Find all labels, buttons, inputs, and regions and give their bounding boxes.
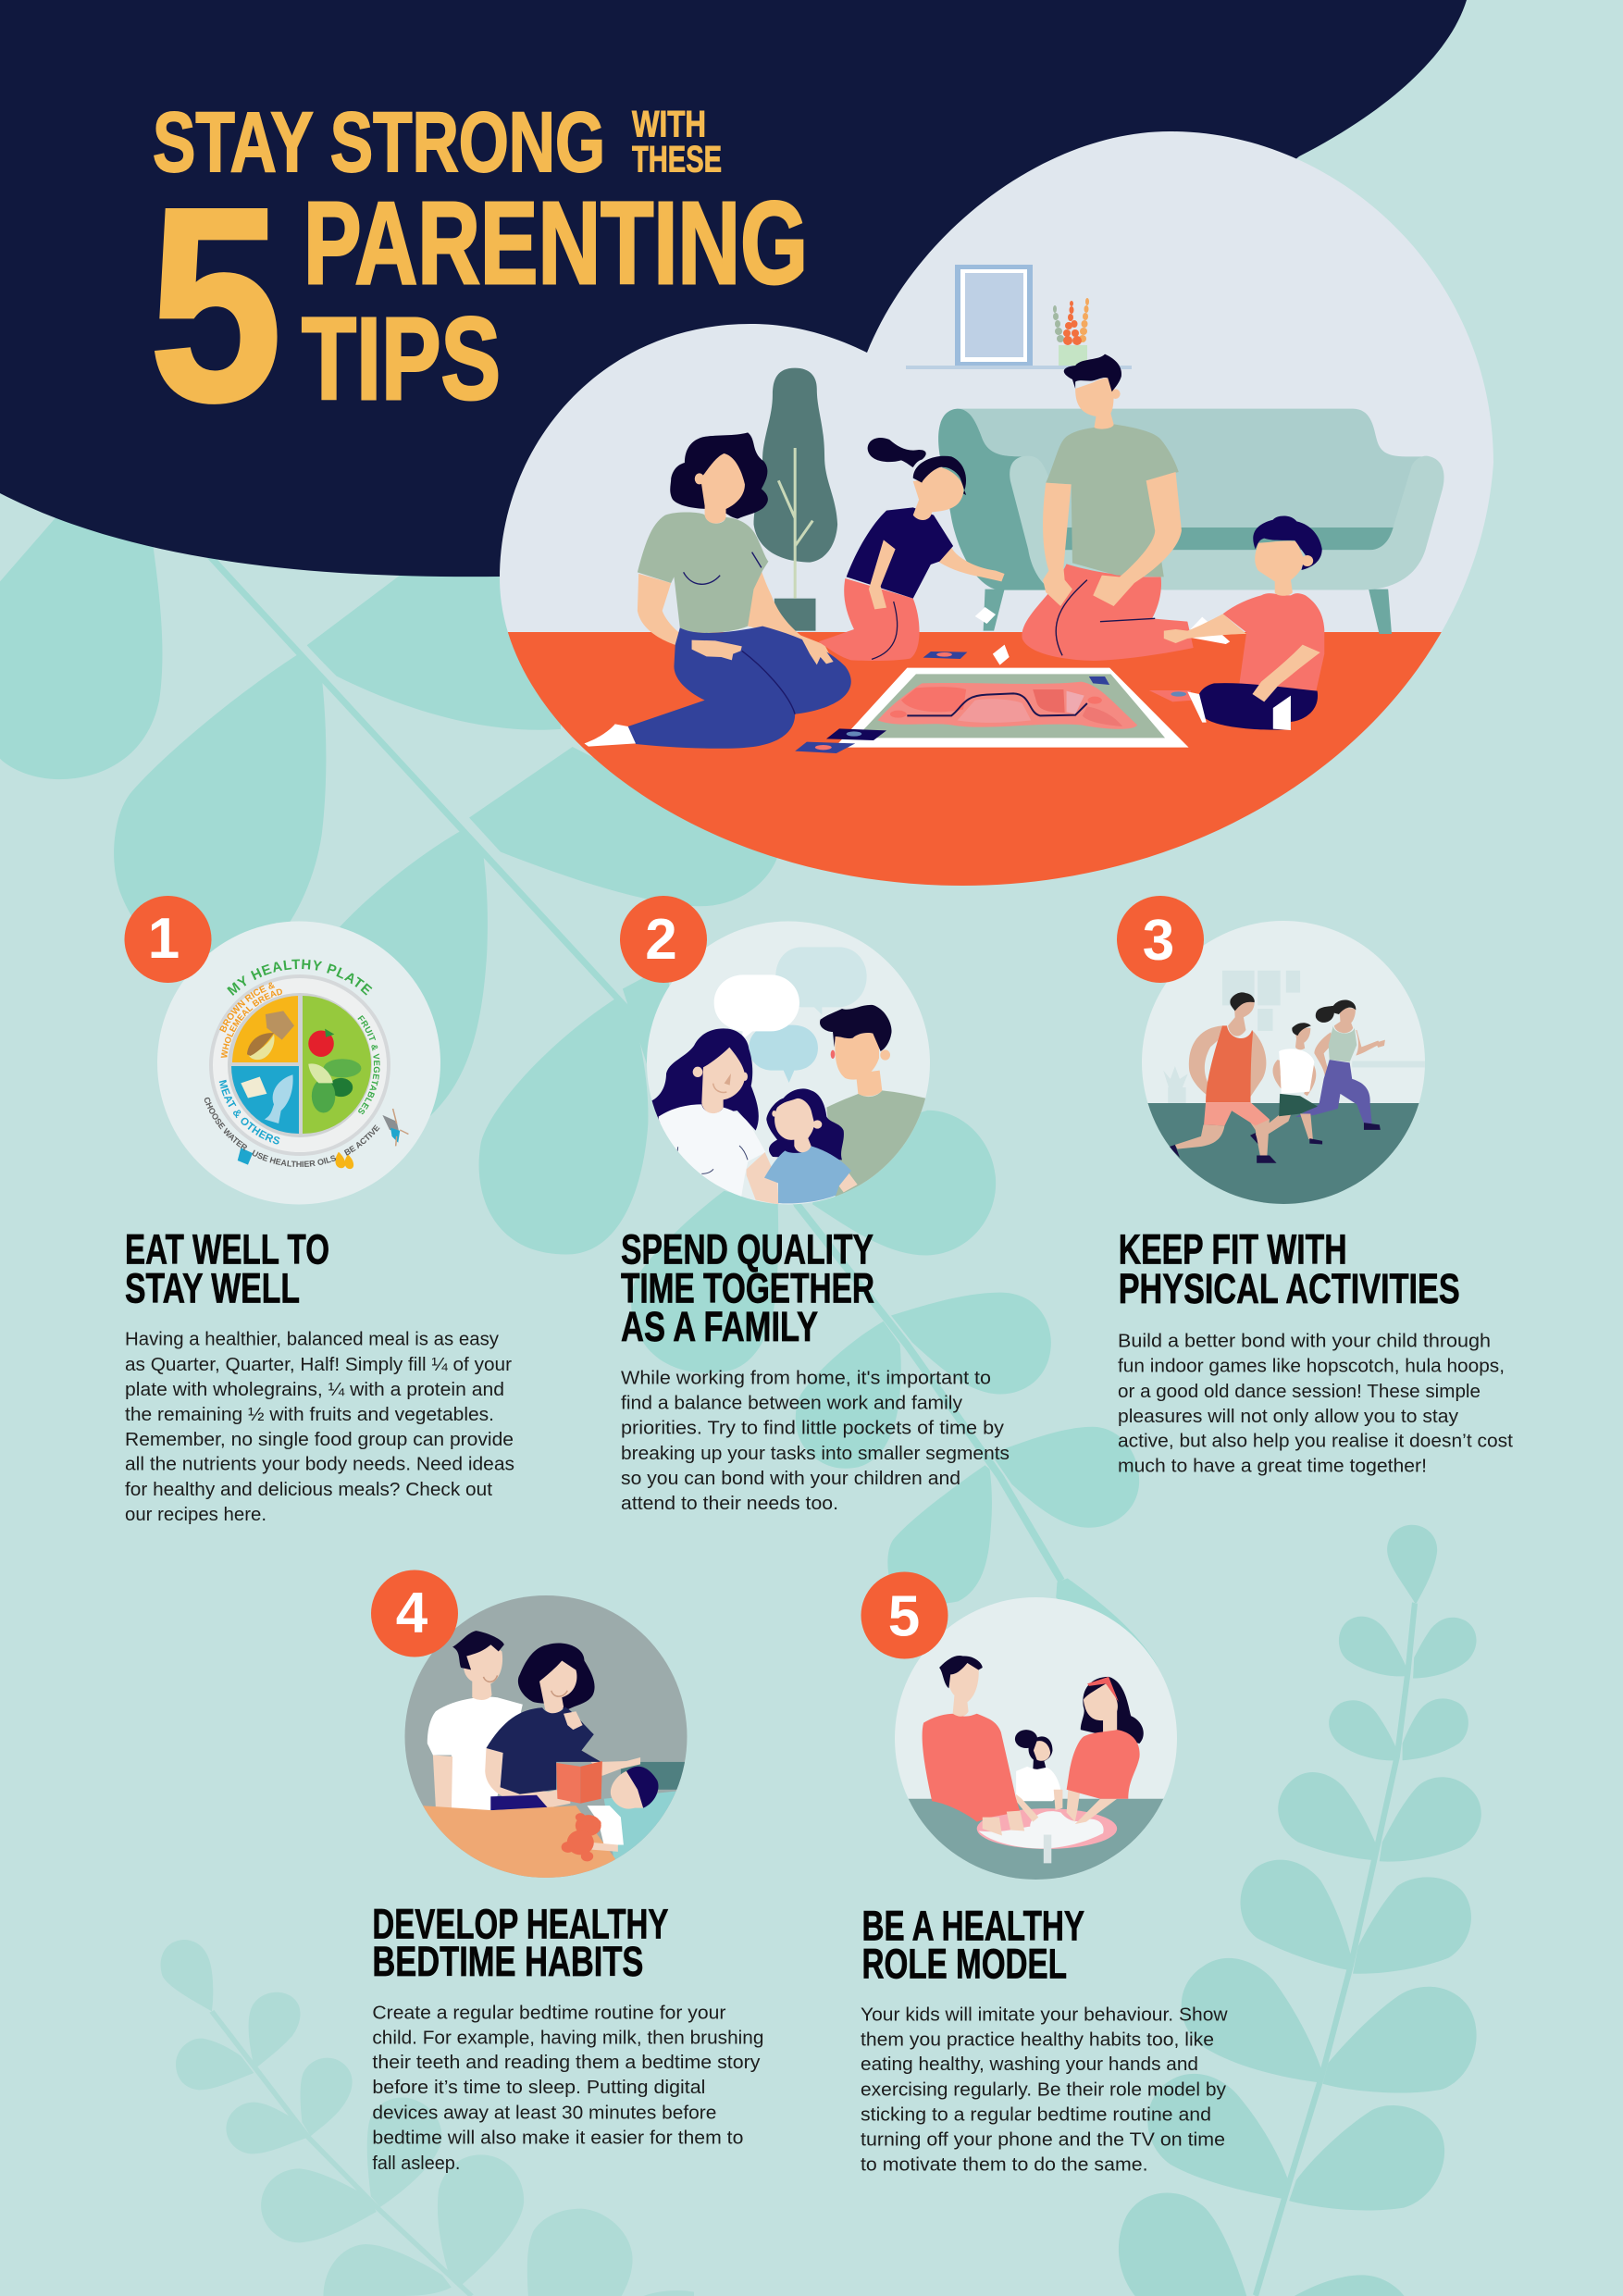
heading 2: TIME TOGETHER <box>621 1264 874 1312</box>
storybook <box>556 1761 602 1804</box>
title line: tips: TIPS <box>302 293 501 424</box>
body text 1: our recipes here. <box>125 1504 266 1525</box>
board game <box>835 668 1189 748</box>
wall <box>490 120 1508 632</box>
badge 1: 1 <box>148 907 180 971</box>
badge 4 <box>371 1570 458 1657</box>
badge 1 <box>124 896 211 983</box>
tip 4 illustration circle <box>405 1595 687 1878</box>
big numeral five: 5 <box>149 151 282 459</box>
father <box>1022 354 1194 661</box>
body text 5: eating healthy, washing your hands and <box>861 2054 1198 2075</box>
daughter <box>764 1088 858 1203</box>
body text 5: sticking to a regular bedtime routine and <box>861 2104 1211 2125</box>
heading 3: KEEP FIT WITH <box>1119 1225 1347 1273</box>
body text 4: Create a regular bedtime routine for your <box>372 2003 726 2023</box>
plate labels: FRUIT & VEGETABLES <box>357 1015 380 1114</box>
plate labels: BROWN RICE & <box>219 983 276 1033</box>
body text 3 <box>1118 1331 1513 1477</box>
counter top <box>909 1799 1164 1880</box>
badge 2: 2 <box>645 908 677 972</box>
potted plant <box>754 368 837 631</box>
hero illustration: family playing a board game <box>490 120 1508 891</box>
badge 3 <box>1117 896 1204 983</box>
mother running <box>1295 999 1385 1130</box>
body text 1: plate with wholegrains, ¼ with a protein and <box>125 1379 504 1400</box>
mother <box>1067 1677 1144 1824</box>
body text 1: the remaining ½ with fruits and vegetables. <box>125 1404 494 1425</box>
body text 3: fun indoor games like hopscotch, hula hoops, <box>1118 1356 1505 1377</box>
body text 1: Having a healthier, balanced meal is as easy <box>125 1329 500 1350</box>
shelf <box>906 366 1132 369</box>
son running <box>1250 1023 1322 1145</box>
body text 3: active, but also help you realise it doesn’t cost <box>1118 1431 1513 1451</box>
body text 1: all the nutrients your body needs. Need ideas <box>125 1454 514 1475</box>
body text 1: as Quarter, Quarter, Half! Simply fill ¼ of your <box>125 1354 512 1375</box>
body text 4: their teeth and reading them a bedtime story <box>372 2052 761 2073</box>
heading 4: DEVELOP HEALTHY <box>372 1900 668 1947</box>
tip 1: eat well <box>124 896 514 1525</box>
mother <box>485 1644 640 1810</box>
floor <box>1147 1103 1419 1204</box>
sofa <box>938 409 1444 634</box>
badge 5: 5 <box>888 1585 920 1649</box>
body text 2: While working from home, it's important to <box>621 1368 991 1388</box>
body text 5: Your kids will imitate your behaviour. Show <box>861 2004 1228 2025</box>
heading 4: BEDTIME HABITS <box>372 1938 643 1985</box>
heading 3: PHYSICAL ACTIVITIES <box>1119 1265 1460 1312</box>
child <box>1015 1730 1062 1822</box>
title line: stay strong: STAY STRONG <box>153 95 605 190</box>
father <box>427 1631 523 1810</box>
tip 3 illustration circle <box>1142 921 1425 1204</box>
heading 2: AS A FAMILY <box>621 1303 818 1350</box>
body text 2 <box>621 1368 1010 1514</box>
body text 1 <box>125 1329 514 1525</box>
tip 5: role model <box>861 1571 1228 2176</box>
heading 4 <box>372 1900 668 1985</box>
plate labels <box>204 959 380 1167</box>
son <box>1164 515 1324 730</box>
father running <box>1169 992 1277 1163</box>
title words: with: WITH <box>632 104 706 144</box>
fish and tofu icon <box>241 1074 293 1123</box>
heading 2: SPEND QUALITY <box>621 1225 873 1273</box>
tip 5 illustration circle <box>895 1597 1177 1880</box>
plate labels: USE HEALTHIER OILS <box>252 1149 337 1167</box>
body text 3: much to have a great time together! <box>1118 1456 1427 1477</box>
body text 1: Remember, no single food group can provide <box>125 1429 514 1450</box>
tip 2 illustration circle <box>647 922 930 1205</box>
body text 3: pleasures will not only allow you to stay <box>1118 1406 1459 1427</box>
heading 5 <box>862 1902 1084 1988</box>
plate labels: MY HEALTHY PLATE <box>227 959 372 996</box>
apple icon <box>308 1029 334 1057</box>
heading 5: BE A HEALTHY <box>862 1902 1084 1949</box>
plate labels: MEAT & OTHERS <box>218 1079 279 1144</box>
leafy vegetables icon <box>308 1059 361 1113</box>
body text 3: or a good old dance session! These simple <box>1118 1381 1481 1402</box>
mother <box>584 432 851 749</box>
body text 4: before it’s time to sleep. Putting digital <box>372 2077 705 2098</box>
body text 5: them you practice healthy habits too, like <box>861 2029 1214 2050</box>
tip 4: bedtime habits <box>371 1570 763 2174</box>
plate labels: BE ACTIVE <box>344 1124 379 1156</box>
body text 4: devices away at least 30 minutes before <box>372 2102 716 2123</box>
water, oil and runner icons <box>238 1109 408 1169</box>
body text 5 <box>861 2004 1228 2176</box>
vase with flowers <box>1053 298 1089 366</box>
title words: these: THESE <box>632 139 722 180</box>
plate labels: CHOOSE WATER <box>204 1098 247 1151</box>
sink with foam <box>977 1808 1117 1863</box>
body text 5: to motivate them to do the same. <box>861 2154 1147 2176</box>
decorative leaf branch: bottom right <box>1119 1525 1481 2296</box>
title line: parenting: PARENTING <box>304 178 808 308</box>
body text 5: turning off your phone and the TV on time <box>861 2128 1225 2150</box>
decorative leaf branch: bottom left <box>161 1940 694 2296</box>
body text 5: exercising regularly. Be their role model by <box>861 2079 1227 2101</box>
game cards and dice <box>795 607 1194 753</box>
heading 1: EAT WELL TO <box>125 1225 329 1273</box>
badge 3: 3 <box>1143 909 1174 973</box>
speech bubbles <box>714 947 867 1083</box>
wall decor <box>1163 971 1428 1103</box>
body text 3: Build a better bond with your child through <box>1118 1331 1491 1352</box>
badge 2 <box>620 896 707 983</box>
body text 4 <box>372 2003 763 2174</box>
teddy bear <box>562 1813 601 1861</box>
headboard band <box>621 1762 694 1790</box>
bread and rice icon <box>247 1011 294 1060</box>
father <box>820 1005 925 1203</box>
picture frame <box>955 265 1033 366</box>
body text 2: priorities. Try to find little pockets of time by <box>621 1418 1005 1439</box>
father <box>923 1656 1024 1836</box>
body text 2: so you can bond with your children and <box>621 1468 960 1489</box>
body text 2: find a balance between work and family <box>621 1393 963 1414</box>
body text 2: breaking up your tasks into smaller segments <box>621 1443 1010 1464</box>
heading 5: ROLE MODEL <box>862 1941 1067 1988</box>
heading 1 <box>125 1225 329 1312</box>
body text 4: child. For example, having milk, then brushing <box>372 2027 763 2048</box>
floor <box>507 632 1442 886</box>
mother <box>650 1028 779 1205</box>
tip 1 illustration circle <box>157 922 440 1205</box>
badge 4: 4 <box>396 1582 428 1645</box>
tip 2: quality time <box>620 896 1010 1514</box>
blanket <box>423 1806 615 1878</box>
daughter <box>819 438 1005 661</box>
healthy plate diagram <box>204 959 409 1170</box>
body text 1: for healthy and delicious meals? Check out <box>125 1479 492 1500</box>
title <box>149 95 808 459</box>
body text 4: bedtime will also make it easier for them to <box>372 2127 743 2148</box>
decorative leaf branch: centre <box>0 514 1158 1667</box>
body text 2: attend to their needs too. <box>621 1493 838 1514</box>
son in bed <box>588 1767 658 1852</box>
tip 3: keep fit <box>1117 896 1513 1477</box>
badge 5 <box>861 1571 948 1658</box>
body text 4: fall asleep. <box>372 2153 460 2174</box>
heading 2 <box>621 1225 874 1350</box>
heading 1: STAY WELL <box>125 1264 300 1312</box>
bed <box>603 1792 675 1860</box>
navy header shape <box>0 0 1467 577</box>
heading 3 <box>1119 1225 1460 1312</box>
plate labels: WHOLEMEAL BREAD <box>220 988 282 1058</box>
